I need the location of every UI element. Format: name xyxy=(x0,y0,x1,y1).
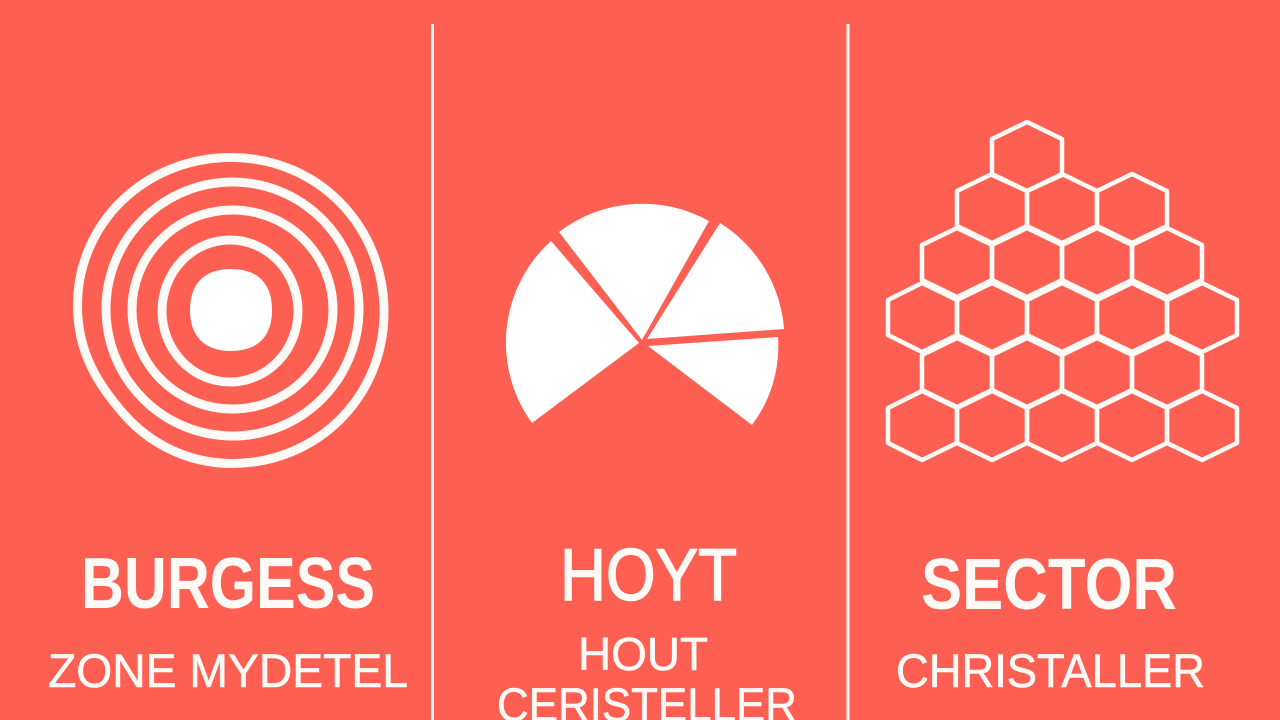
subheading: Christaller: CHRISTALLER xyxy=(896,644,1205,697)
icon: sector pie xyxy=(506,204,784,425)
subheading: Hout: HOUT xyxy=(578,628,708,680)
icon: concentric rings xyxy=(78,158,384,464)
heading: Burgess: BURGESS xyxy=(81,544,375,624)
panel: Burgess zone model xyxy=(48,158,408,697)
subheading: Zone Mydetel: ZONE MYDETEL xyxy=(48,644,408,697)
heading: Hoyt: HOYT xyxy=(560,535,737,616)
icon: hexagon lattice xyxy=(888,122,1237,460)
heading: Sector: SECTOR xyxy=(921,545,1177,625)
panel: Hoyt sector model xyxy=(497,204,797,720)
panel: Christaller sector model xyxy=(888,122,1237,697)
